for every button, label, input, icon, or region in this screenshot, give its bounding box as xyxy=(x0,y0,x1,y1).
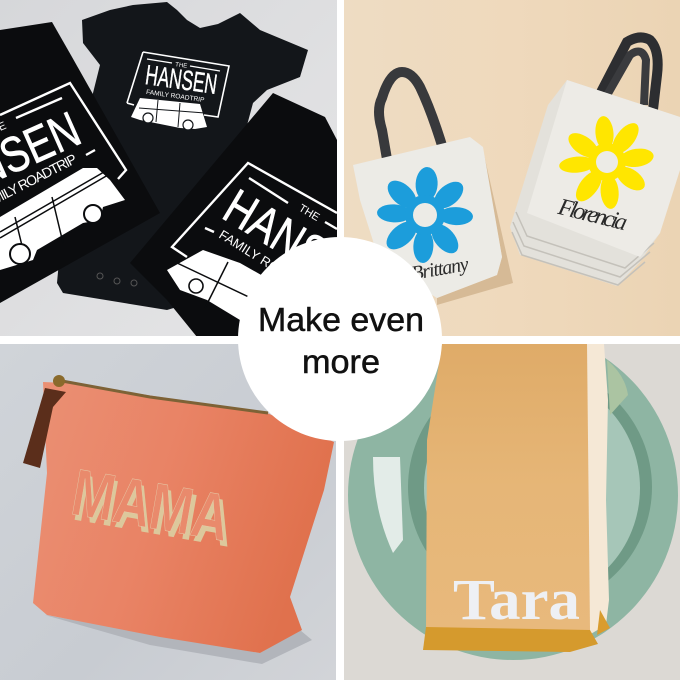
panel: coral pouch xyxy=(0,344,336,680)
yellow flower xyxy=(558,115,655,210)
name: Tara: Tara xyxy=(453,567,580,632)
MAMA text xyxy=(72,469,228,547)
napkin body xyxy=(426,344,590,630)
pouch body xyxy=(33,382,334,653)
onesie logo xyxy=(127,52,229,130)
onesie logo: THE xyxy=(175,62,187,70)
front tote xyxy=(527,80,680,257)
plate xyxy=(348,330,678,660)
onesie xyxy=(57,2,308,310)
zipper xyxy=(62,381,268,413)
panel: personalised tote bags xyxy=(344,0,680,336)
stacked tote handles xyxy=(597,37,658,118)
onesie logo: HANSEN xyxy=(144,59,219,100)
leather strap xyxy=(23,388,66,468)
napkin fringe bottom xyxy=(423,627,598,652)
zipper pull xyxy=(53,375,65,387)
right t-shirt logo: THE xyxy=(296,202,321,224)
badge text: more xyxy=(302,343,380,380)
left tote handle xyxy=(379,72,444,165)
onesie snaps xyxy=(97,273,137,286)
right t-shirt logo: FAMILY ROADTRIP xyxy=(216,227,323,301)
large t-shirt xyxy=(0,22,160,303)
left tote shadow xyxy=(437,150,513,305)
right t-shirt xyxy=(130,93,337,337)
name: Brittany: Brittany xyxy=(409,253,471,285)
napkin fold xyxy=(597,610,610,635)
central badge xyxy=(238,237,442,441)
name: Florencia: Florencia xyxy=(555,194,630,236)
badge text: Make even xyxy=(258,301,424,338)
napkin fringe right xyxy=(585,344,609,635)
panel: black family t-shirts xyxy=(0,0,337,336)
MAMA text: MAMA xyxy=(69,460,239,561)
badge text xyxy=(258,301,424,380)
right t-shirt logo xyxy=(167,162,337,320)
stacked tote bodies xyxy=(510,80,680,286)
panel: napkin on green plate xyxy=(344,330,680,680)
onesie logo: FAMILY ROADTRIP xyxy=(146,89,205,104)
pouch shadow xyxy=(45,615,312,664)
right t-shirt logo: HANSEN xyxy=(214,178,385,311)
blue flower xyxy=(377,166,473,263)
left tote body xyxy=(353,137,502,298)
MAMA text: MAMA xyxy=(67,455,235,555)
